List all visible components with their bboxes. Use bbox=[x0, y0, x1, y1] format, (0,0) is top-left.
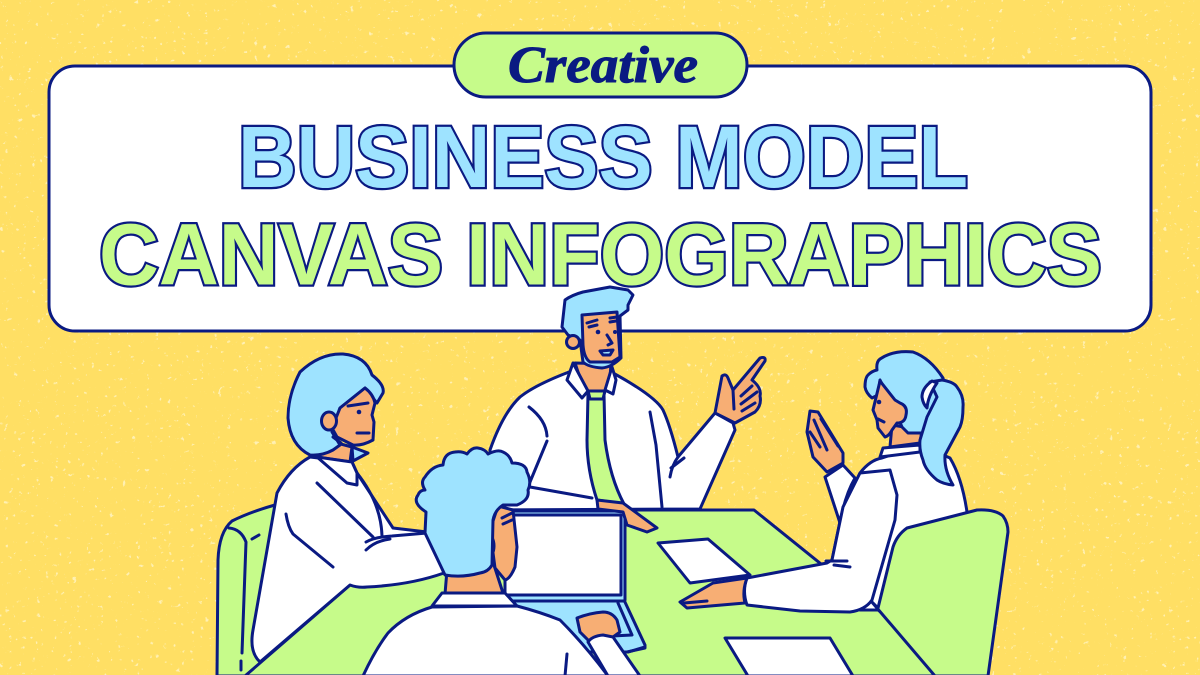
right woman torso bbox=[832, 445, 970, 610]
left woman face bbox=[332, 388, 375, 445]
right woman arm bbox=[744, 470, 897, 612]
right woman hair tie bbox=[922, 381, 937, 408]
title panel bbox=[49, 66, 1151, 331]
right woman collar bbox=[880, 445, 920, 457]
left woman fold lines bbox=[286, 473, 427, 567]
meeting table bbox=[245, 510, 960, 675]
back man neck bbox=[445, 562, 503, 594]
presenter collar right bbox=[605, 367, 616, 394]
presenter collar left bbox=[567, 363, 588, 398]
left woman hair bbox=[288, 354, 383, 455]
back man sleeve bbox=[588, 635, 640, 675]
presenter hand on table bbox=[597, 500, 657, 532]
presenter face bbox=[582, 312, 620, 362]
badge: Creative: Creative bbox=[508, 37, 698, 94]
presenter neck bbox=[575, 363, 611, 391]
presenter shirt bbox=[490, 372, 735, 510]
laptop bbox=[505, 511, 645, 652]
presenter features bbox=[587, 317, 617, 345]
right woman features bbox=[878, 419, 884, 422]
person: woman on left bbox=[252, 354, 444, 662]
back man hair bbox=[416, 448, 530, 576]
presenter sleeve and fold lines bbox=[529, 407, 684, 507]
presenter tie knot bbox=[588, 391, 605, 399]
presenter ear bbox=[566, 336, 580, 348]
laptop base bbox=[505, 600, 645, 652]
right woman face and ear bbox=[873, 381, 906, 437]
right woman hair bbox=[865, 352, 950, 433]
laptop screen bbox=[505, 511, 625, 601]
presenter tie bbox=[587, 394, 624, 504]
right woman neck bbox=[890, 425, 922, 447]
back man collar bbox=[432, 593, 517, 606]
paper near bbox=[725, 638, 853, 675]
left woman neck bbox=[317, 443, 352, 462]
left woman shirt bbox=[252, 457, 444, 662]
left woman features bbox=[333, 403, 369, 443]
presenter pointing hand bbox=[715, 357, 765, 423]
title line 2: CANVAS INFOGRAPHICS bbox=[99, 206, 1102, 304]
title line 1: BUSINESS MODEL bbox=[238, 109, 968, 206]
left woman ear bbox=[322, 412, 336, 430]
person: presenter bbox=[490, 287, 765, 510]
back man ear bbox=[480, 534, 494, 558]
right chair bbox=[871, 510, 1008, 675]
left woman blue scarf bbox=[352, 447, 368, 461]
presenter beard and hair bbox=[562, 287, 633, 368]
right woman hand on table bbox=[680, 578, 747, 608]
left chair bbox=[217, 505, 300, 675]
back man shirt bbox=[363, 606, 608, 675]
back man hand bbox=[577, 612, 620, 642]
left woman collar bbox=[317, 457, 357, 485]
paper far bbox=[658, 539, 750, 583]
person: woman on right bbox=[680, 352, 1008, 675]
right woman raised forearm bbox=[825, 465, 855, 523]
right woman ponytail bbox=[920, 380, 963, 485]
badge: Creative bbox=[454, 33, 747, 97]
right woman raised hand bbox=[807, 411, 843, 472]
back man face side bbox=[490, 506, 517, 580]
person: man seen from behind bbox=[363, 448, 640, 675]
